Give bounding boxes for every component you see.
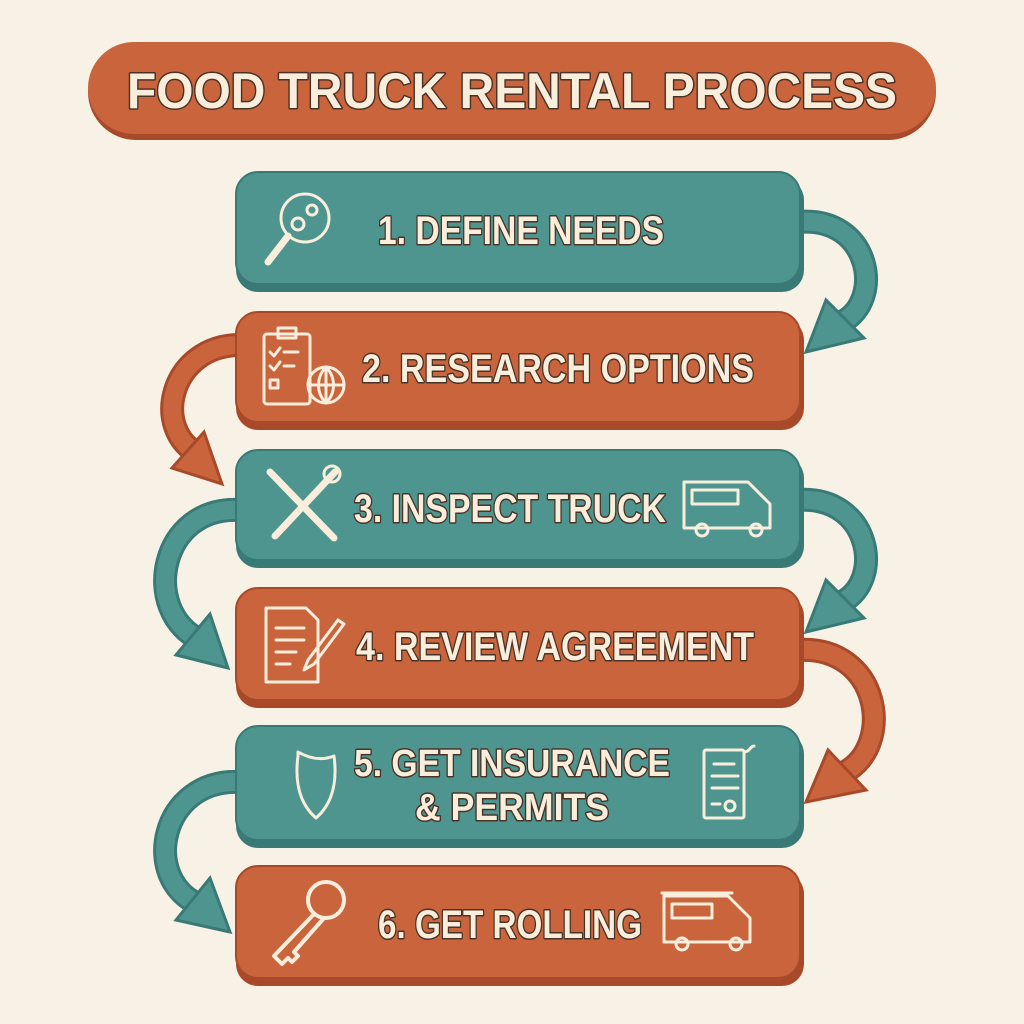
step 5: & PERMITS xyxy=(415,787,609,829)
title xyxy=(88,42,936,140)
icon: clipboard globe xyxy=(264,328,344,404)
step 3: 3. INSPECT TRUCK xyxy=(354,487,666,531)
step 5 xyxy=(236,726,804,848)
arrow: 3 to 4 right xyxy=(798,500,866,632)
step 1 xyxy=(236,172,804,292)
icon: food truck xyxy=(662,893,750,950)
arrow: 5 to 6 xyxy=(165,782,240,932)
icon: shield xyxy=(297,752,335,818)
icon: certificate xyxy=(704,746,754,818)
step 5: 5. GET INSURANCE xyxy=(354,743,670,785)
icon: document pen xyxy=(266,608,344,682)
step 6: 6. GET ROLLING xyxy=(378,903,642,947)
arrow: 3 to 4 left xyxy=(165,510,240,668)
step 4 xyxy=(236,588,804,708)
step 2: 2. RESEARCH OPTIONS xyxy=(362,347,754,391)
step 2 xyxy=(236,312,804,430)
title: FOOD TRUCK RENTAL PROCESS xyxy=(127,63,897,119)
icon: food truck xyxy=(684,482,770,536)
arrow: 2 to 3 xyxy=(172,345,240,484)
icon: tools xyxy=(270,466,340,538)
step 1: 1. DEFINE NEEDS xyxy=(378,209,664,253)
arrow: 4 to 5 xyxy=(798,650,874,802)
arrow: 1 to 2 xyxy=(798,222,866,352)
step 6 xyxy=(236,866,804,986)
icon: key xyxy=(274,882,344,964)
step 4: 4. REVIEW AGREEMENT xyxy=(356,625,754,669)
step 3 xyxy=(236,450,804,568)
icon: magnifier gears xyxy=(268,194,329,262)
